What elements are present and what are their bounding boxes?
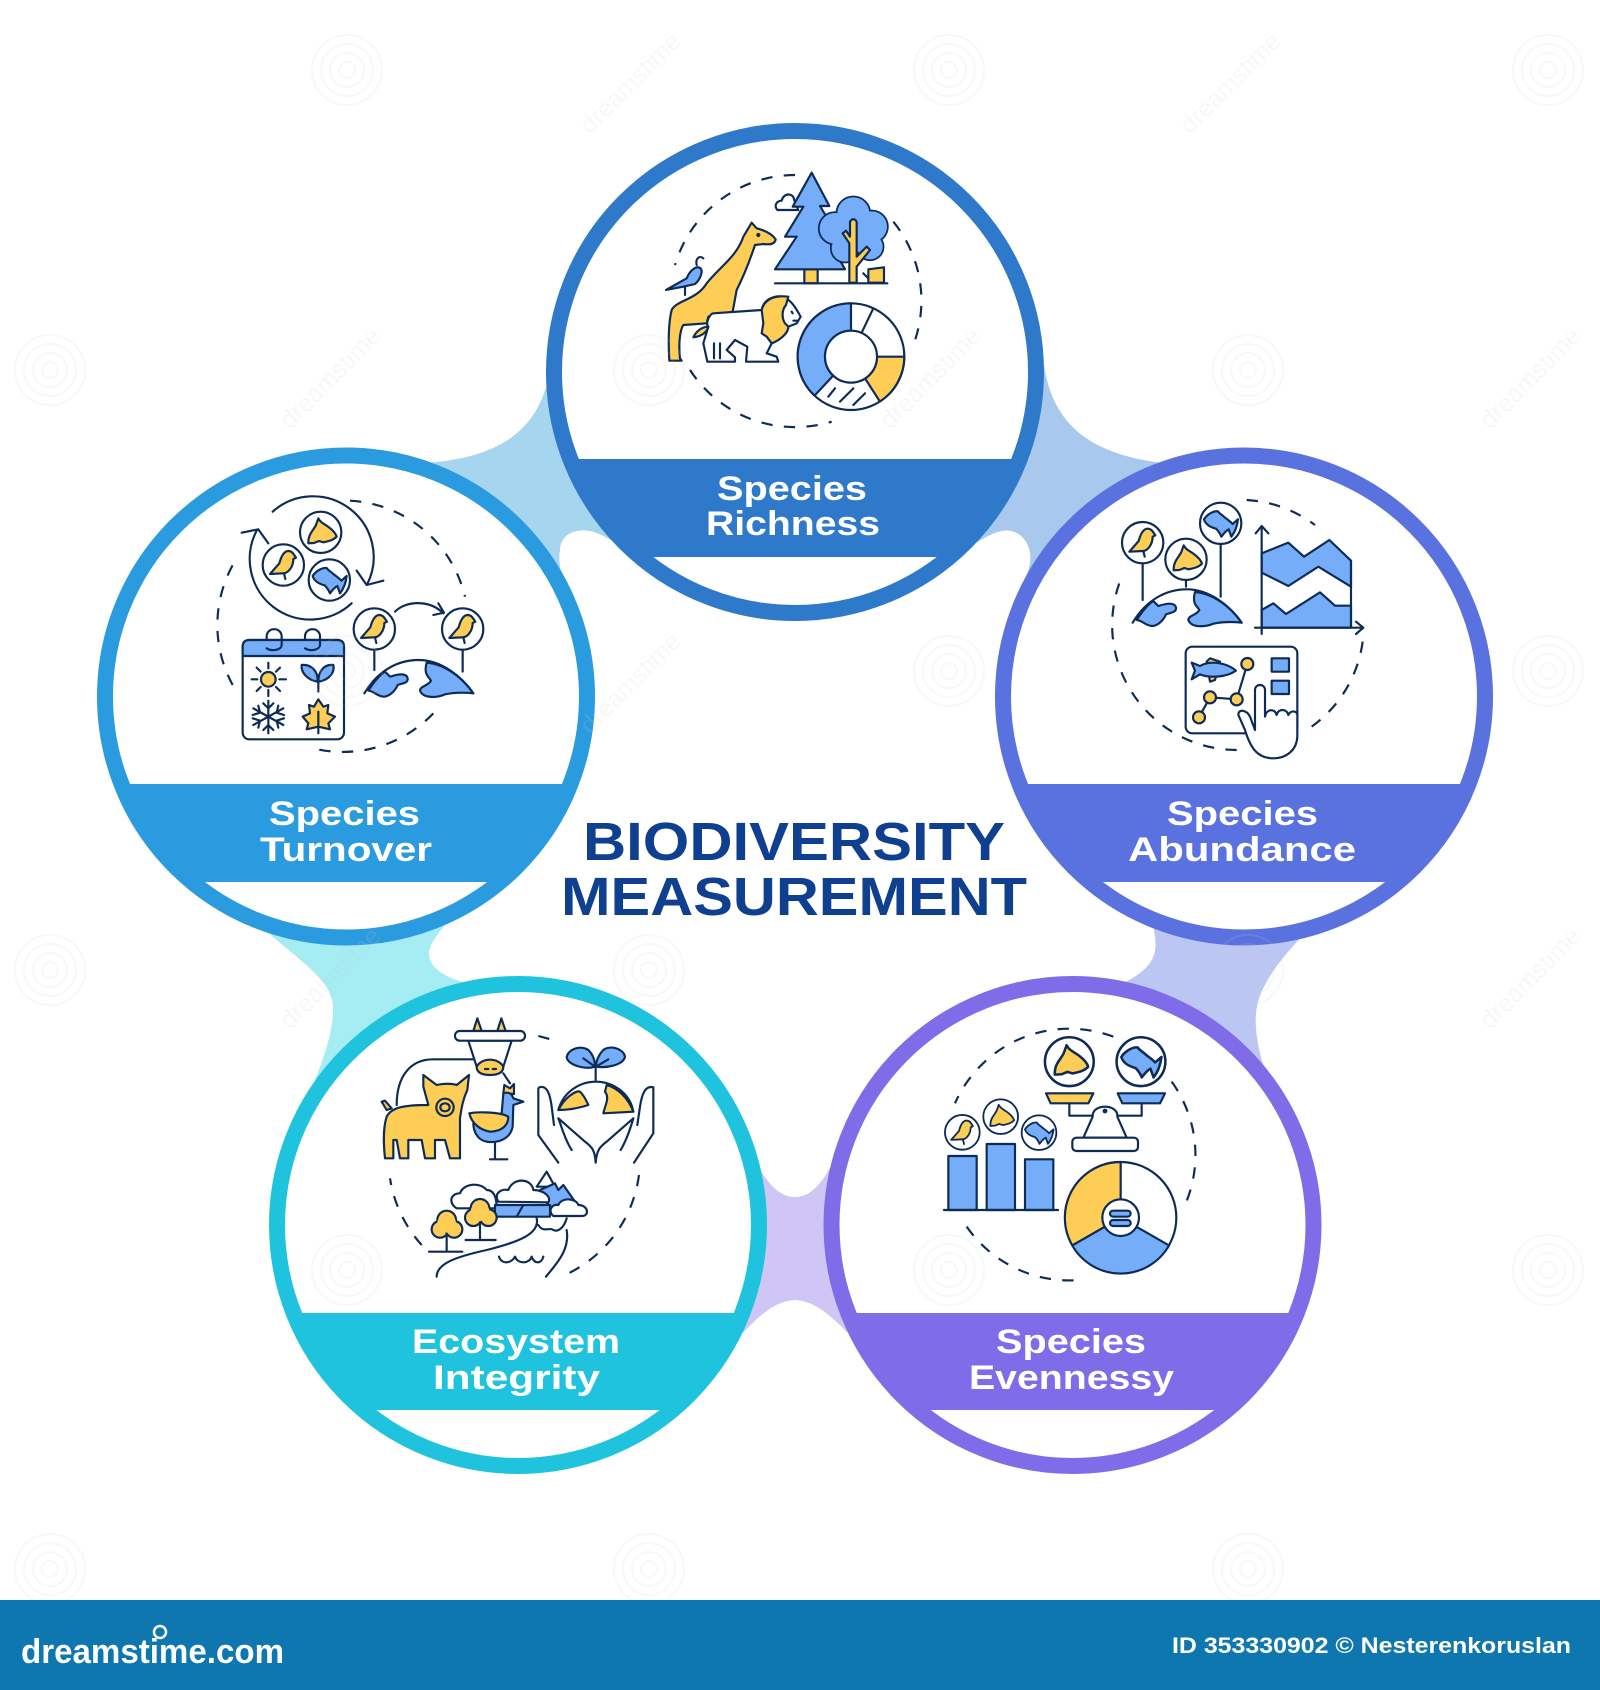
band — [302, 1313, 734, 1410]
ring — [554, 131, 1036, 613]
label — [969, 1323, 1174, 1397]
label: Species — [1167, 795, 1318, 833]
watermark: dreamstime — [274, 322, 387, 434]
watermark: dreamstime — [574, 27, 687, 139]
icon: globe pins, area chart and touch panel — [1112, 500, 1363, 758]
title: BIODIVERSITY — [583, 812, 1005, 872]
label: Richness — [706, 505, 880, 543]
connector: top to left — [425, 370, 650, 610]
band — [1028, 784, 1460, 882]
title — [561, 812, 1027, 927]
ring — [105, 456, 587, 938]
watermark: dreamstime — [1474, 922, 1587, 1034]
footer credit: ID 353330902 © Nesterenkoruslan — [1172, 1633, 1571, 1658]
panel: species turnover — [90, 456, 600, 938]
ring — [277, 984, 759, 1466]
watermark: dreamstime — [1474, 322, 1587, 434]
watermark: dreamstime — [874, 322, 987, 434]
label: Ecosystem — [412, 1323, 620, 1361]
icon: animals, trees and donut chart — [666, 173, 921, 427]
label — [1128, 795, 1356, 869]
band — [130, 784, 562, 882]
label: Species — [996, 1323, 1146, 1361]
label: Evennessy — [969, 1359, 1174, 1397]
icon: scale, bar chart and pie chart — [944, 1029, 1195, 1280]
label: Integrity — [433, 1359, 600, 1397]
connector: bottom left to bottom right — [730, 1168, 860, 1335]
title: MEASUREMENT — [561, 867, 1027, 927]
label — [260, 795, 432, 869]
connector: top to right — [940, 365, 1172, 602]
ring — [832, 984, 1314, 1466]
footer logo: dreamstime.com — [21, 1633, 284, 1671]
panel: ecosystem integrity — [260, 984, 770, 1466]
connector: right to bottom right — [1100, 850, 1312, 1078]
footer bar — [0, 1600, 1600, 1690]
watermark: dreamstime — [1174, 27, 1287, 139]
band — [578, 459, 1012, 557]
band — [856, 1313, 1288, 1410]
label: Abundance — [1128, 831, 1356, 869]
icon: species cycle, calendar and migration — [217, 496, 483, 752]
panel: species richness — [540, 131, 1050, 613]
ring — [1003, 456, 1485, 938]
label: Turnover — [260, 831, 432, 869]
label: Species — [717, 470, 867, 508]
watermark: dreamstime — [274, 922, 387, 1034]
panel: species evenness — [820, 984, 1330, 1466]
panel: species abundance — [990, 456, 1500, 938]
label — [706, 470, 880, 543]
watermark: dreamstime — [574, 627, 687, 739]
label — [412, 1323, 620, 1397]
label: Species — [269, 795, 420, 833]
connector: left to bottom left — [240, 880, 475, 1100]
icon: farm animals, hands with globe and landscape — [382, 1018, 653, 1277]
